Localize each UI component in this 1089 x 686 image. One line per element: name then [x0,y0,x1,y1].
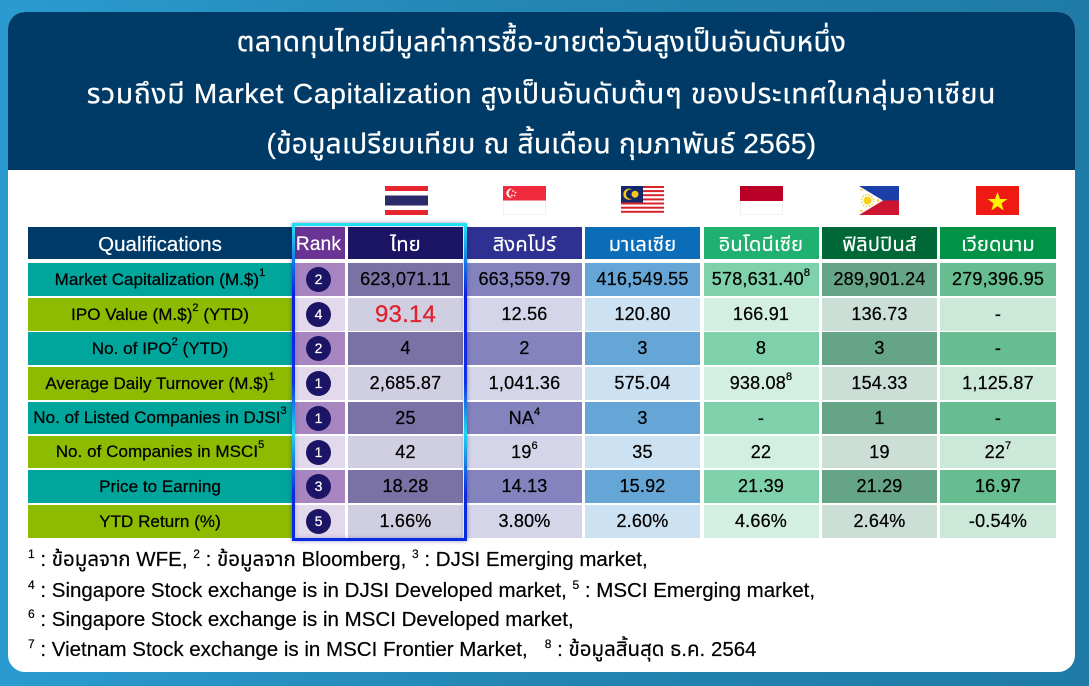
row: Average Daily Turnover: Average Daily Turnover (M.$)1 [45,371,275,392]
row: Listed Companies in DJSI [28,402,1056,434]
table header row: อินโดนีเซีย [719,234,803,256]
row: Listed Companies in DJSI: NA4 [509,406,540,428]
row: Average Daily Turnover: 575.04 [614,373,671,393]
row: Average Daily Turnover: 2,685.87 [370,373,441,393]
row: Price to Earning: 15.92 [619,476,666,496]
title banner: ตลาดทุนไทยมีมูลค่าการซื้อ-ขายต่อวันสูงเป็นอันดับหนึ่ง [237,26,846,57]
row: Market Capitalization: 289,901.24 [833,269,926,289]
row: Market Capitalization [28,263,1056,296]
footnotes [28,547,815,662]
row: Price to Earning: 21.39 [738,476,784,496]
row: Price to Earning: 16.97 [975,476,1021,496]
icon: Vietnam flag [976,186,1019,215]
row: No. of IPO: - [995,338,1001,358]
icon: Singapore flag [503,186,546,215]
row: Price to Earning: 18.28 [382,476,429,496]
row: IPO Value: 93.14 [375,300,436,328]
footnotes: 4 : Singapore Stock exchange is in DJSI Developed market, 5 : MSCI Emerging market, [28,578,815,602]
row: YTD Return: 1.66% [379,511,432,531]
table header row: มาเลเซีย [609,234,676,256]
row: Listed Companies in DJSI: 25 [395,408,416,428]
row: Companies in MSCI: 227 [985,440,1011,462]
icon: Indonesia flag [740,186,783,215]
row: Companies in MSCI: 22 [751,442,771,462]
title banner [8,12,1075,170]
row: Market Capitalization: 2 [315,271,322,287]
row: Price to Earning [28,470,1056,503]
row: Market Capitalization: Market Capitalization (M.$)1 [55,267,265,288]
row: Listed Companies in DJSI: No. of Listed Companies in DJSI3 [33,405,287,427]
row: No. of IPO: 4 [400,338,411,358]
row: YTD Return: -0.54% [969,511,1027,531]
row: YTD Return: 4.66% [735,511,787,531]
footnotes: 7 : Vietnam Stock exchange is in MSCI Frontier Market, 8 : ข้อมูลสิ้นสุด ธ.ค. 2564 [28,637,757,661]
row: IPO Value: 4 [315,306,322,322]
row: No. of IPO: 2 [315,340,322,356]
row: IPO Value: 136.73 [851,304,908,324]
row: IPO Value: 166.91 [733,304,789,324]
row: YTD Return: 5 [315,513,322,529]
row: Companies in MSCI: 35 [632,442,653,462]
row: Price to Earning: 21.29 [856,476,903,496]
row: YTD Return: 2.60% [616,511,669,531]
table header row: ฟิลิปปินส์ [842,234,917,256]
row: Market Capitalization: 416,549.55 [596,269,689,289]
row: YTD Return: 2.64% [853,511,906,531]
icon: Philippines flag [859,186,899,215]
row: Listed Companies in DJSI: 3 [637,408,648,428]
row: IPO Value: 120.80 [614,304,671,324]
row: No. of IPO: 3 [637,338,648,358]
row: Price to Earning: 3 [315,478,322,494]
row: Companies in MSCI: 1 [315,444,322,460]
table header row: สิงคโปร์ [493,234,556,256]
row: YTD Return: YTD Return (%) [99,512,221,530]
footnotes: 6 : Singapore Stock exchange is in MSCI Developed market, [28,607,574,631]
table header row: เวียดนาม [961,234,1035,256]
table header row [28,227,1056,259]
row: Listed Companies in DJSI: 1 [874,408,885,428]
row: IPO Value: - [995,304,1001,324]
row: YTD Return: 3.80% [498,511,551,531]
row: Market Capitalization: 578,631.408 [712,267,810,289]
row: No. of IPO: 2 [519,338,530,358]
icon: Malaysia flag [621,186,664,213]
row: Companies in MSCI [28,436,1056,468]
row: Companies in MSCI: 19 [869,442,890,462]
row: Companies in MSCI: No. of Companies in MSCI5 [56,439,264,461]
row: Price to Earning: Price to Earning [99,476,221,496]
row: YTD Return [28,505,1056,538]
row: Companies in MSCI: 42 [395,442,416,462]
row: Market Capitalization: 623,071.11 [360,269,451,289]
row: IPO Value: 12.56 [501,304,548,324]
row: Listed Companies in DJSI: - [995,408,1001,428]
table header row: Qualifications [98,232,222,256]
row: No. of IPO: No. of IPO2 (YTD) [92,336,228,358]
row: No. of IPO: 8 [756,338,766,358]
row: Companies in MSCI: 196 [511,440,538,462]
row: Listed Companies in DJSI: - [758,408,764,428]
row: No. of IPO: 3 [874,338,885,358]
table header row: Rank [296,234,341,254]
row: Average Daily Turnover: 154.33 [851,373,908,393]
row: IPO Value: IPO Value (M.$)2 (YTD) [71,302,249,324]
row: Average Daily Turnover: 1,125.87 [962,373,1034,393]
highlight frame: Thailand column [292,223,467,541]
row: Market Capitalization: 279,396.95 [952,269,1044,289]
row: IPO Value [28,298,1056,331]
row: No. of IPO [28,332,1056,365]
footnotes: 1 : ข้อมูลจาก WFE, 2 : ข้อมูลจาก Bloomberg, 3 : DJSI Emerging market, [28,547,648,571]
row: Price to Earning: 14.13 [501,476,548,496]
row: Market Capitalization: 663,559.79 [478,269,571,289]
icon: Thailand flag [385,186,428,215]
row: Average Daily Turnover: 1 [315,375,322,391]
row: Average Daily Turnover: 938.088 [730,371,792,393]
row: Average Daily Turnover: 1,041.36 [489,373,560,393]
table header row: ไทย [390,234,421,256]
title banner: (ข้อมูลเปรียบเทียบ ณ สิ้นเดือน กุมภาพันธ์ 2565) [267,128,816,159]
title banner: รวมถึงมี Market Capitalization สูงเป็นอันดับต้นๆ ของประเทศในกลุ่มอาเซียน [87,78,996,109]
row: Average Daily Turnover [28,367,1056,400]
row: Listed Companies in DJSI: 1 [315,410,322,426]
